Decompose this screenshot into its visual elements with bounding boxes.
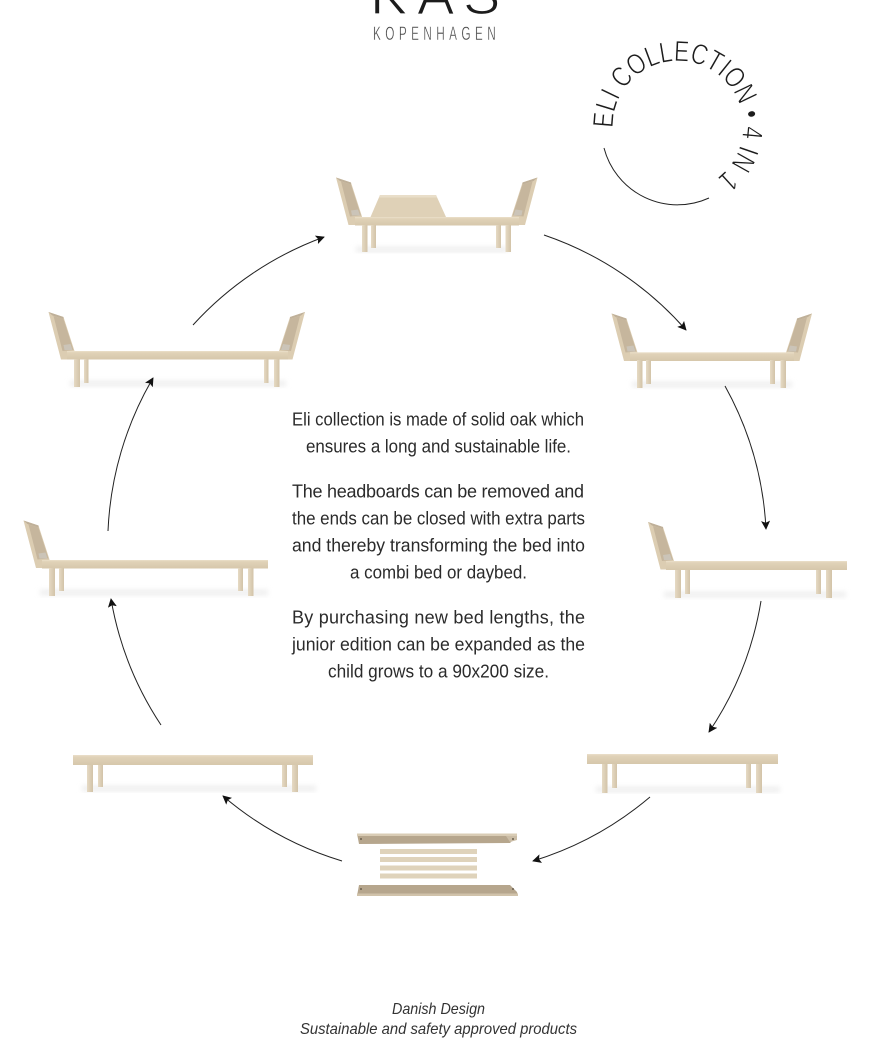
paragraph: solid oak: ensures a long and sustainable life. [306, 436, 571, 456]
logo subtitle: KOPENHAGEN [373, 24, 496, 45]
arrow: right to single headboard [725, 386, 766, 529]
paragraph: bed lengths: junior edition can be expanded as the [291, 634, 585, 654]
arrow: single headboard to plain frame [709, 601, 761, 732]
bed: two headboards, long (left) [48, 312, 305, 387]
bed: single headboard (right) [648, 522, 847, 598]
badge arc [604, 148, 709, 205]
bed: plain frame, long (left) [73, 755, 316, 792]
bottom rail [357, 885, 518, 896]
arrow: long two headboards to top [193, 237, 324, 325]
badge text: ELI COLLECTION • 4 IN 1 [593, 41, 762, 190]
arrow: long plain frame to long single headboard [111, 599, 161, 725]
arrow: parts to long plain frame [223, 796, 342, 861]
paragraph: headboards: The headboards can be removed and [292, 482, 584, 502]
paragraph: bed lengths [291, 608, 585, 682]
circular badge: Eli collection 4 in 1 [593, 41, 762, 206]
footer text: Sustainable and safety approved products [300, 1021, 577, 1038]
bed: daybed with back panel (top) [336, 178, 538, 252]
paragraph: solid oak: Eli collection is made of solid oak which [292, 410, 584, 430]
paragraph: solid oak [292, 410, 584, 456]
bed: plain frame (right) [587, 754, 780, 793]
bed: two headboards (right) [612, 314, 812, 388]
paragraph: headboards [292, 482, 585, 582]
footer text [300, 1001, 577, 1038]
arrow: long single headboard to long two headboards [108, 378, 153, 531]
paragraph: bed lengths: By purchasing new bed lengths, the [292, 608, 585, 628]
center text block [291, 410, 585, 682]
paragraph: headboards: and thereby transforming the bed into [292, 536, 585, 556]
paragraph: headboards: a combi bed or daybed. [350, 562, 527, 582]
bed: single headboard, long (left) [24, 520, 268, 596]
footer text: Danish Design [392, 1001, 485, 1018]
arrow: top to right [544, 235, 686, 330]
paragraph: bed lengths: child grows to a 90x200 size. [328, 662, 549, 682]
logo [370, 0, 500, 45]
bed parts: rails and slats [357, 834, 518, 896]
top rail [357, 834, 517, 844]
slats [380, 849, 477, 878]
arrow: plain frame to parts [533, 797, 650, 861]
paragraph: headboards: the ends can be closed with extra parts [292, 508, 585, 528]
